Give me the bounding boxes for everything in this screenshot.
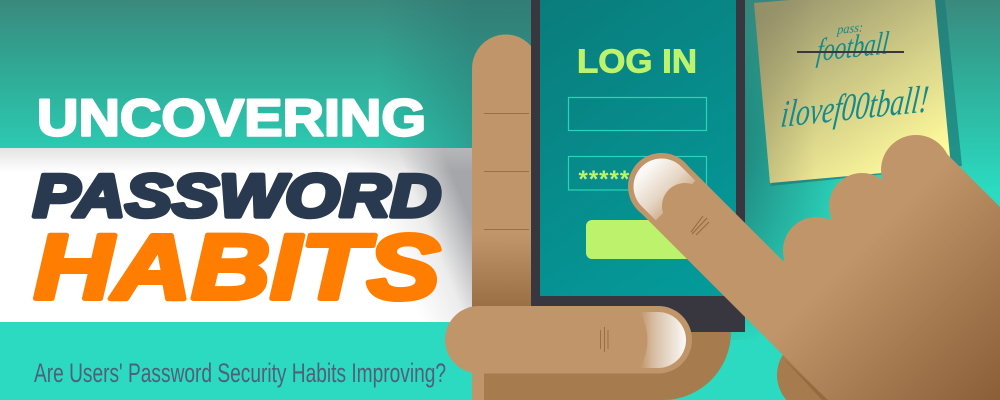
title: habits: HABITS	[34, 216, 440, 318]
note text: new password: ilovef00tball!	[779, 78, 931, 136]
phone	[531, 0, 745, 332]
finger creases	[691, 216, 709, 235]
pointing finger and knuckles	[628, 135, 1000, 400]
log in heading: LOG IN	[577, 44, 697, 80]
submit button	[586, 220, 716, 259]
white title band	[0, 148, 472, 322]
phone body	[531, 0, 745, 332]
password field	[568, 156, 706, 190]
right hand	[628, 135, 1000, 400]
strike line	[797, 51, 904, 53]
fingernail	[634, 159, 708, 229]
finger creases	[484, 114, 529, 230]
sticky note	[754, 0, 962, 186]
note text: football: football	[815, 24, 891, 68]
title: password: PASSWORD	[33, 162, 441, 230]
left finger	[472, 34, 531, 400]
note text: pass: pass:	[836, 19, 864, 37]
note paper	[754, 0, 951, 183]
subtitle: Are Users' Password Security Habits Improving?	[34, 358, 446, 388]
lower palm	[777, 337, 853, 400]
note shadow	[770, 0, 962, 186]
phone screen	[540, 0, 736, 296]
password asterisks: *****	[578, 166, 630, 193]
thumb creases	[600, 327, 608, 352]
thumbnail	[640, 312, 686, 368]
title: uncovering: UNCOVERING	[37, 90, 426, 148]
thumb	[445, 306, 692, 400]
palm behind phone	[484, 320, 731, 400]
username field	[568, 98, 706, 130]
